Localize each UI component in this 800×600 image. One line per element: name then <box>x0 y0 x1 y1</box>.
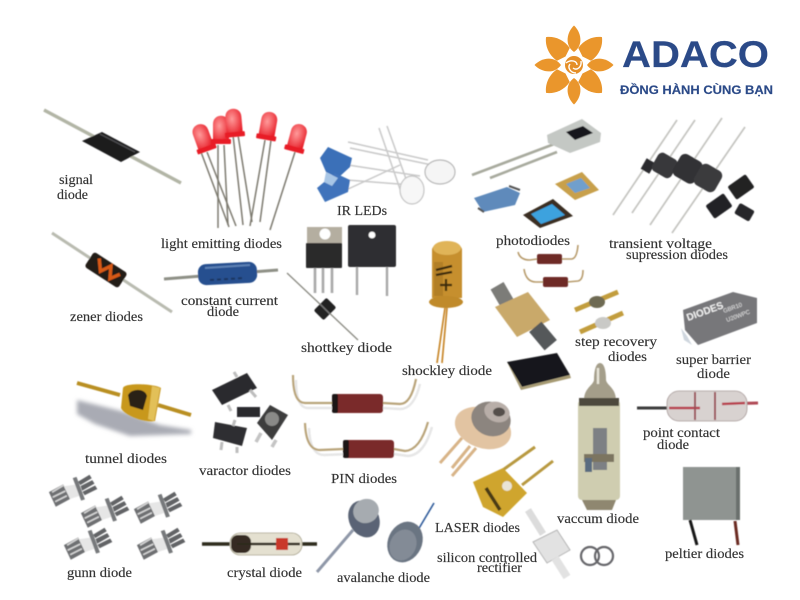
label: zener diodes: zener diodes <box>70 309 143 324</box>
icon: gold laser mount <box>473 447 553 517</box>
icon: constant current diode <box>164 261 278 286</box>
label: diode: diode <box>657 437 689 452</box>
icon: shottkey diode <box>287 273 358 340</box>
icon: crystal diode <box>202 533 317 555</box>
icon: photodiode chip, framed <box>523 199 573 228</box>
label: IR LEDs: IR LEDs <box>337 203 387 218</box>
tunnel diodes <box>77 383 191 466</box>
label: gunn diode: gunn diode <box>67 565 132 580</box>
label: step recovery: step recovery <box>575 334 657 349</box>
icon: PIN diode 1 <box>293 375 420 413</box>
LASER diodes <box>435 396 553 535</box>
varactor diodes <box>199 372 291 478</box>
icon: laser TO-can <box>440 396 517 476</box>
transient voltage suppression diodes <box>609 118 755 262</box>
icon: varactor packages <box>212 372 288 453</box>
icon: tunnel diode <box>77 383 191 436</box>
logo: ADACO <box>534 26 773 104</box>
icon: gunn diodes <box>47 472 187 562</box>
crystal diode <box>202 533 317 580</box>
label: supression diodes: supression diodes <box>626 247 728 262</box>
label: shottkey diode: shottkey diode <box>301 340 392 355</box>
icon: RF gold module <box>491 282 557 350</box>
label: LASER diodes: LASER diodes <box>435 520 520 535</box>
icon: TO-247 package <box>348 225 396 296</box>
label: light emitting diodes: light emitting diodes <box>161 236 282 251</box>
icon: shockley diode can <box>429 241 463 363</box>
label: tunnel diodes: tunnel diodes <box>85 451 167 466</box>
light emitting diodes <box>161 108 311 251</box>
label: PIN diodes: PIN diodes <box>331 471 397 486</box>
label: signal: signal <box>59 172 93 187</box>
label: photodiodes: photodiodes <box>496 233 570 248</box>
gunn diode <box>47 472 187 580</box>
icon: zener diode <box>52 233 172 312</box>
icon: super barrier package: U20WPC <box>726 309 752 324</box>
label: vaccum diode: vaccum diode <box>557 511 639 526</box>
icon: super barrier package: DIODES <box>685 300 725 324</box>
vaccum diode <box>557 363 639 526</box>
icon: vacuum tube <box>578 363 620 510</box>
IR LEDs <box>317 126 455 218</box>
PIN diodes <box>293 375 432 486</box>
icon: TVS diodes <box>613 118 755 233</box>
label: diode: diode <box>57 187 88 202</box>
silicon controlled rectifier <box>437 510 613 577</box>
icon: super barrier package <box>681 292 757 345</box>
label: diodes: diodes <box>608 349 647 364</box>
constant current diode <box>164 261 278 319</box>
peltier diodes <box>665 467 744 561</box>
label: diode: diode <box>697 366 730 381</box>
shockley diode <box>402 241 492 378</box>
icon: photodiode chip, gold <box>555 172 599 200</box>
icon: signal diode <box>44 110 181 183</box>
icon: avalanche diode 2 <box>381 503 434 568</box>
icon: avalanche diode 1 <box>317 495 386 572</box>
label: transient voltage: transient voltage <box>609 236 712 251</box>
label: rectifier: rectifier <box>477 560 523 575</box>
label: avalanche diode: avalanche diode <box>337 570 430 585</box>
logo wordmark: ADACO <box>622 34 769 75</box>
label: varactor diodes: varactor diodes <box>199 463 291 478</box>
icon: IR LEDs <box>317 126 455 204</box>
icon: peltier module <box>683 467 740 545</box>
zener diodes <box>52 233 172 324</box>
icon: black chip <box>507 353 571 390</box>
label: diode: diode <box>207 304 239 319</box>
point contact diode <box>637 391 758 452</box>
icon: photodiode module <box>472 119 601 178</box>
label: silicon controlled: silicon controlled <box>437 550 537 565</box>
icon: axial brown diodes <box>518 245 583 287</box>
label: crystal diode: crystal diode <box>227 565 302 580</box>
logo tagline: ĐỒNG HÀNH CÙNG BẠN <box>620 82 773 97</box>
super barrier diode <box>676 292 757 381</box>
icon: super barrier package: GBR10 <box>723 302 744 315</box>
icon: orange flower <box>534 26 614 104</box>
label: peltier diodes: peltier diodes <box>665 546 744 561</box>
step recovery diodes <box>491 245 657 364</box>
label: constant current: constant current <box>181 293 278 308</box>
icon: PIN diode 2 <box>305 422 432 458</box>
label: point contact: point contact <box>643 425 720 440</box>
label: super barrier: super barrier <box>676 352 752 367</box>
signal diode <box>44 110 181 202</box>
icon: photodiode chip, blue <box>474 186 520 212</box>
label: shockley diode: shockley diode <box>402 363 492 378</box>
icon: gold ribbon diodes <box>575 292 623 332</box>
power packages <box>306 225 396 296</box>
icon: TO-220 package <box>306 227 342 293</box>
photodiodes <box>472 119 601 248</box>
shottkey diode <box>287 273 392 355</box>
icon: red LEDs <box>188 108 311 230</box>
icon: SCR stud <box>528 510 570 577</box>
avalanche diode <box>317 495 434 585</box>
icon: SCR nut rings <box>581 547 613 565</box>
icon: point contact diode <box>637 391 758 421</box>
